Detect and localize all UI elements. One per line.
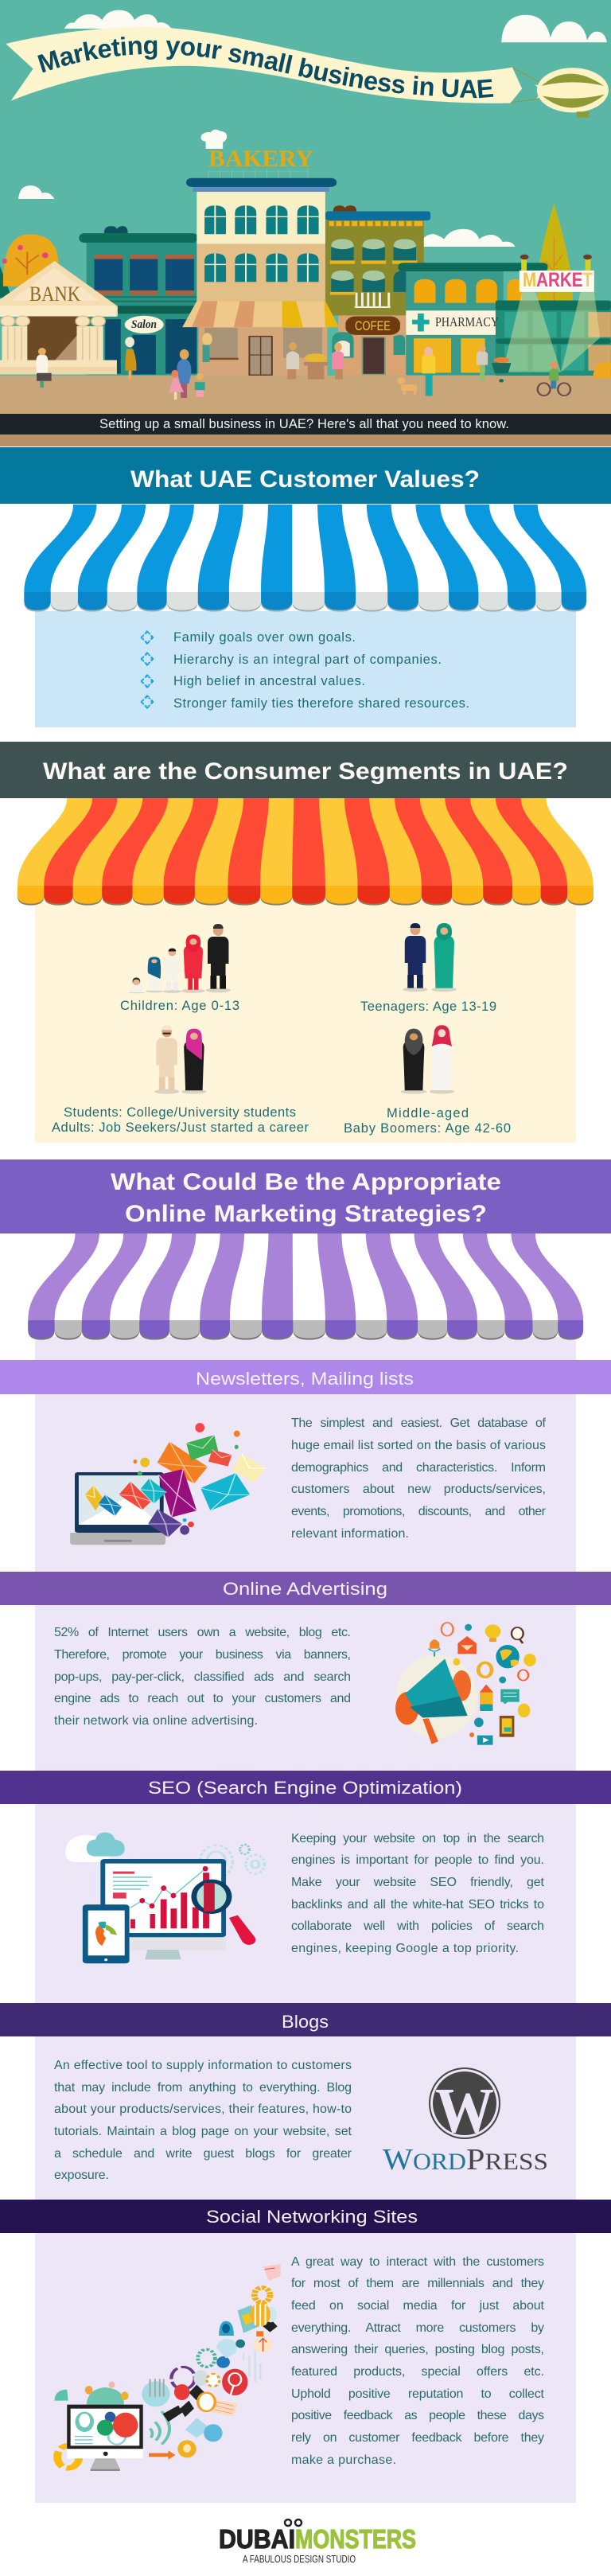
text: SEO: engines, keeping Google a top priority.	[291, 1942, 519, 1955]
heading: online marketing strategies: Online Marketing Strategies?	[125, 1201, 487, 1227]
bakery building	[182, 130, 339, 376]
bar: Social Networking Sites	[0, 2200, 611, 2233]
panel: customer values list	[35, 611, 576, 727]
list text: Hierarchy is an integral part of companies.	[173, 653, 442, 667]
text: SEO: backlinks and all the white-hat SEO tricks to	[291, 1898, 544, 1912]
logo: Dubai Monsters: DUBAI	[219, 2524, 295, 2554]
labels: segments: Adults: Job Seekers/Just started a career	[52, 1120, 309, 1135]
illustration: SEO monitor and magnifier	[65, 1833, 265, 1963]
text: social networking	[291, 2255, 545, 2467]
heading: online marketing strategies	[0, 1159, 611, 1233]
labels: segments: Teenagers: Age 13-19	[360, 1000, 496, 1014]
panel: consumer segments	[35, 899, 576, 1143]
text: SEO: Keeping your website on top in the search	[291, 1832, 544, 1845]
text: online advertising	[54, 1626, 351, 1728]
list text: Stronger family ties therefore shared resources.	[173, 696, 469, 711]
bar: Newsletters, Mailing lists	[0, 1360, 611, 1394]
hero: town scene	[0, 0, 611, 446]
text: online advertising: pop-ups, pay-per-click, classified ads and search	[54, 1670, 351, 1684]
awning: purple	[28, 1233, 583, 1340]
labels: segments: Students: College/University students	[64, 1105, 296, 1120]
text: SEO: Make your website SEO friendly, get	[291, 1876, 545, 1889]
yellow cone tree	[537, 204, 573, 301]
logo: WordPress	[383, 2068, 548, 2177]
figures: teenagers	[403, 923, 457, 992]
street people	[37, 333, 570, 399]
text: blogs: that may include from anything to everything. Blog	[54, 2081, 352, 2095]
clouds	[18, 10, 607, 247]
text: blogs: exposure.	[54, 2169, 109, 2182]
bar: Newsletters, Mailing lists: Newsletters, Mailing lists	[196, 1369, 414, 1389]
heading: What are the Consumer Segments in UAE?	[0, 742, 611, 798]
banner ropes	[511, 68, 542, 103]
list text: Family goals over own goals.	[173, 630, 356, 645]
labels: segments: Children: Age 0-13	[120, 999, 239, 1013]
text: online advertising: their network via online advertising.	[54, 1714, 258, 1728]
labels: segments: Baby Boomers: Age 42-60	[344, 1121, 511, 1136]
heading: What UAE Customer Values?: What UAE Customer Values?	[130, 466, 480, 493]
text: SEO: collaborate well with policies of search	[291, 1919, 544, 1933]
text: social networking: rely on customer feedback before they	[291, 2431, 544, 2445]
text: social networking: A great way to interact with the customers	[291, 2255, 544, 2269]
salon building	[79, 226, 198, 375]
text: blogs: a schedule and write guest blogs for greater	[54, 2147, 352, 2161]
coffee building	[325, 205, 430, 376]
bank building	[0, 261, 118, 374]
text: newsletters	[291, 1417, 547, 1541]
hero building signs: PHARMACY	[435, 314, 499, 329]
text: online advertising: engine ads to reach out to your customers and	[54, 1692, 351, 1705]
icon: bullet 4	[140, 695, 154, 709]
bar: SEO	[0, 1771, 611, 1804]
text: newsletters: events, promotions, discounts, and other	[291, 1505, 547, 1518]
text: social networking: make a purchase.	[291, 2453, 396, 2467]
text: blogs: An effective tool to supply information to customers	[54, 2059, 352, 2072]
text: social networking: positive feedback as people these days	[291, 2409, 544, 2422]
labels: segments	[52, 999, 511, 1136]
logo: Dubai Monsters: MONSTERS	[295, 2524, 416, 2554]
illustration: social network icons	[55, 2264, 281, 2471]
pharmacy building	[398, 263, 548, 375]
list text	[173, 630, 469, 711]
icon: bullet 2	[140, 652, 154, 666]
awning: blue	[24, 505, 586, 612]
logo: Dubai Monsters	[219, 2519, 416, 2565]
icon: bullet 1	[140, 630, 154, 645]
text: SEO	[291, 1832, 545, 1955]
icon: bullet 3	[140, 674, 154, 688]
text: blogs: about your products/services, their features, how-to	[54, 2102, 352, 2116]
text: social networking: Uphold positive reputation to collect	[291, 2387, 545, 2401]
hero subtitle bar	[0, 414, 611, 435]
heading: What UAE Customer Values?	[0, 447, 611, 504]
bar: Online Advertising: Online Advertising	[223, 1579, 387, 1599]
bar: Blogs	[0, 2003, 611, 2036]
hero building signs	[29, 146, 593, 333]
airship	[535, 68, 609, 117]
bar: Blogs: Blogs	[282, 2012, 329, 2032]
labels: segments: Middle-aged	[387, 1106, 469, 1120]
text: blogs: tutorials. Maintain a blog page on your website, set	[54, 2125, 352, 2138]
hero building signs: BAKERY	[208, 146, 313, 172]
text: newsletters: demographics and characteristics. Inform	[291, 1461, 546, 1475]
awning: yellow and red	[18, 798, 593, 906]
text: newsletters: The simplest and easiest. Get database of	[291, 1417, 547, 1430]
text: newsletters: customers about new products/services,	[291, 1483, 546, 1496]
banner ribbon	[6, 27, 522, 103]
hero building signs: Salon	[131, 318, 157, 331]
hero building signs: COFEE	[355, 318, 391, 333]
illustration: laptop and envelopes	[70, 1423, 266, 1545]
text: newsletters: huge email list sorted on the basis of various	[291, 1439, 546, 1452]
text: blogs	[54, 2059, 352, 2182]
heading: What are the Consumer Segments in UAE?: What are the Consumer Segments in UAE?	[43, 758, 568, 785]
bar: Social Networking Sites: Social Networking Sites	[206, 2207, 418, 2227]
logo: WordPress: WORD	[383, 2143, 466, 2177]
bar: Online Advertising	[0, 1572, 611, 1605]
hero building signs: MARKET	[523, 269, 593, 291]
logo: WordPress: W	[435, 2076, 494, 2146]
logo: WordPress: PRESS	[466, 2143, 548, 2177]
tree left	[0, 267, 12, 298]
text: social networking: answering their queries, posting blog posts,	[291, 2343, 544, 2356]
text: SEO: engines is important for people to find you.	[291, 1853, 544, 1867]
text: social networking: everything. Attract more customers by	[291, 2321, 544, 2335]
figures: children	[127, 924, 231, 993]
logo: Dubai Monsters: A FABULOUS DESIGN STUDIO	[243, 2553, 356, 2565]
figures: students and adults	[154, 1025, 207, 1094]
heading: online marketing strategies: What Could Be the Appropriate	[111, 1169, 501, 1195]
illustration: megaphone	[395, 1623, 536, 1745]
text: online advertising: Therefore, promote your business via banners,	[54, 1648, 351, 1662]
figures: middle-aged and baby boomers	[401, 1025, 454, 1094]
market building	[496, 255, 611, 379]
hero subtitle bar: Setting up a small business in UAE? Here's all that you need to know.	[99, 417, 509, 431]
hero title	[41, 54, 509, 98]
hero illustration shapes	[0, 10, 611, 399]
hero building signs: BANK	[29, 283, 80, 306]
list text: High belief in ancestral values.	[173, 674, 365, 688]
text: online advertising: 52% of Internet users own a website, blog etc.	[54, 1626, 351, 1639]
text: newsletters: relevant information.	[291, 1527, 409, 1541]
panel: strategies background	[35, 1337, 576, 2503]
text: social networking: feed on social media for just about	[291, 2299, 545, 2313]
hero: town scene: Marketing your small business in UAE	[37, 37, 493, 99]
text: social networking: for most of them are millennials and they	[291, 2277, 544, 2290]
bar: SEO: SEO (Search Engine Optimization)	[148, 1778, 462, 1798]
text: social networking: featured products, special offers etc.	[291, 2365, 544, 2379]
